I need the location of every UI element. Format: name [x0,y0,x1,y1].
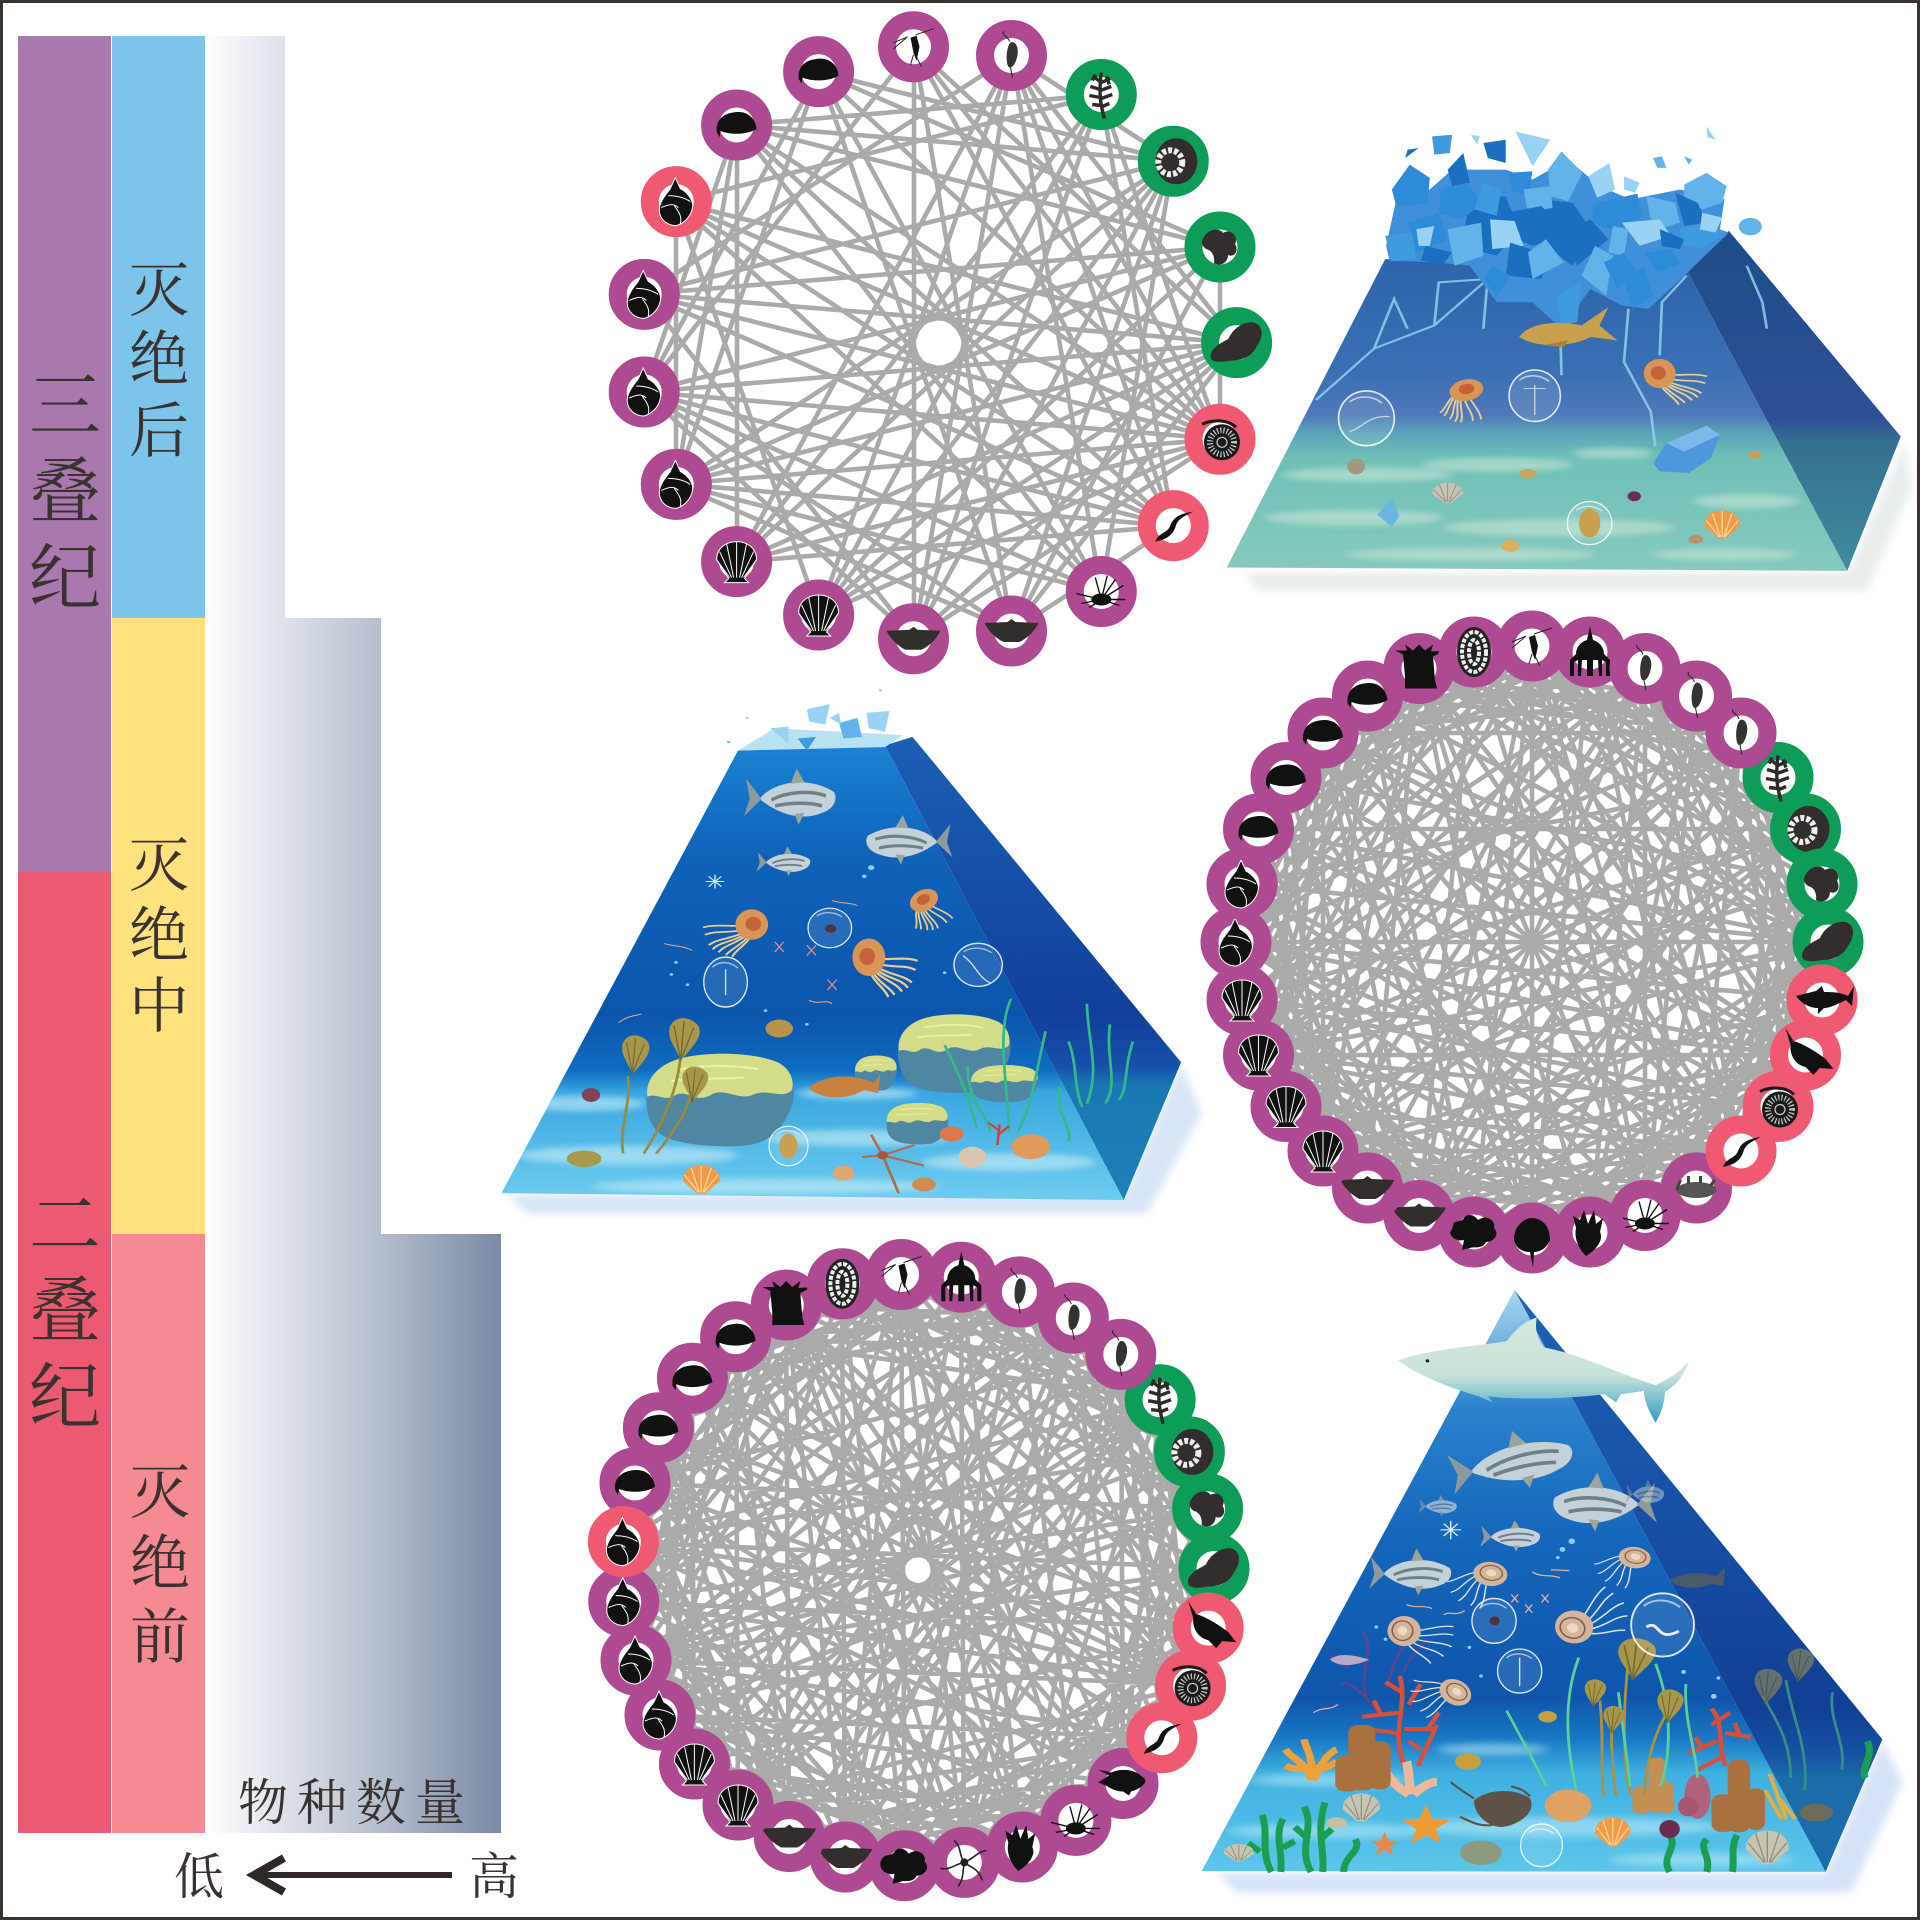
node: flagellate [993,1265,1046,1318]
node: scallop [668,1738,721,1790]
ice on summit [727,689,903,751]
network links [644,47,1237,639]
node: scallop [710,535,763,588]
node: snail, pink [650,175,703,228]
food web: during extinction [1210,620,1854,1268]
food web: pre-extinction [597,1248,1241,1892]
node: bony fish [1182,1601,1236,1655]
green seaweed [1248,1741,1869,1872]
period bar: Permian [18,872,111,1833]
food web: post-extinction [618,20,1263,665]
pyramid: pre-extinction ocean [1202,1290,1902,1892]
node: seaweed [1134,1373,1187,1426]
node: algae mat [1188,1542,1240,1595]
stage bar: post-extinction [112,36,205,618]
fishes [744,768,952,1097]
stage bar: during extinction: 绝 [129,903,189,969]
node: snail, pink [597,1515,650,1568]
node: ostracod [1232,802,1285,856]
node: algae mat [1802,916,1854,968]
node: ammonite [1194,413,1246,466]
red corals [1362,1676,1751,1770]
nodes [597,1248,1241,1892]
node: snail [1210,916,1262,968]
node: foraminifera [1147,135,1200,188]
arrow: high to low [254,1858,452,1892]
node: flagellate [985,29,1038,82]
period bar: Triassic: 三 [29,367,101,447]
node: ammonite [1164,1659,1217,1712]
node: copepod [875,1248,928,1301]
node: seaweed [1075,68,1128,121]
seabed streaks [518,1087,1096,1194]
node: brachiopod [818,1830,872,1884]
node: seaweed [1752,751,1804,804]
stage bar: pre-extinction: 绝 [130,1531,190,1597]
ice blocks [1385,126,1762,329]
node: scallop [792,588,845,642]
node: snail [618,366,671,418]
period bar: Triassic: 叠 [29,453,101,533]
node: sea urchin [1075,565,1128,618]
gold fish [1519,307,1617,347]
stage bar: during extinction [112,618,205,1234]
shells on seabed [1347,451,1761,552]
species count stepped gradient bars [205,36,501,1833]
ice cracks [1316,266,1767,446]
node: snail [650,458,703,511]
small bubbles [1374,1538,1720,1699]
plankton bubbles [704,908,1002,1166]
low label: 低 [174,1849,224,1905]
seabed streaks [1227,1744,1795,1866]
node: diatom [816,1257,869,1310]
node: brachiopod [1340,1162,1394,1214]
ammonites [1427,359,1707,430]
node: snail [597,1575,650,1628]
node: trilobite [1506,1212,1558,1268]
ammonites [703,885,964,997]
node: flagellate [1094,1328,1147,1381]
node: worm [1135,1711,1188,1764]
side face [1684,231,1901,571]
node: ostracod [792,45,845,98]
node: flagellate [1714,706,1768,760]
shark [1398,1318,1689,1423]
front face [1227,259,1847,571]
node: algae blob [1796,858,1848,910]
node: radiolarian [935,1251,988,1304]
stage bar: post-extinction: 后 [129,399,189,465]
node: coral [878,1839,931,1892]
node: foraminifera [1163,1425,1216,1478]
node: urchin [1049,1794,1102,1847]
node: flagellate [1047,1292,1100,1344]
pyramid: during extinction ocean [501,689,1202,1214]
node: diatom [1448,626,1500,678]
node: brachiopod [886,612,940,665]
node: scallop [712,1778,764,1832]
shadow [508,1064,1202,1214]
nodes [618,20,1263,665]
kelp fans [622,1018,708,1154]
period bar: Permian: 纪 [29,1358,101,1438]
node: anemone [760,1278,813,1332]
node: brachiopod [984,604,1038,658]
node: urchin [1618,1189,1672,1242]
node: shark [1796,974,1854,1026]
node: anemone [1392,642,1446,695]
stage bar: pre-extinction: 灭 [130,1460,190,1526]
node: snail [634,1688,686,1742]
stage bar: pre-extinction [112,1234,205,1833]
nautiloids [1385,1541,1653,1729]
front face [1202,1290,1826,1872]
stage bar: during extinction: 灭 [129,833,189,899]
seabed streaks [1265,448,1800,561]
node: ostracod [666,1352,719,1405]
node: snail [618,268,671,321]
shadow [1247,441,1912,591]
period bar: Triassic: 纪 [29,539,101,619]
node: radiolarian [1564,626,1616,678]
sea grass [945,999,1133,1141]
node: algae blob [1194,220,1246,274]
node: small fish [1096,1757,1150,1810]
node: scallop [1296,1124,1350,1178]
rocks with algae [646,1014,1038,1146]
node: ostracod [710,98,763,152]
node: brachiopod [1392,1189,1446,1242]
node: ostracod [1296,706,1350,760]
brown sponges [1335,1725,1765,1832]
shells and starfish [567,1020,1050,1194]
node: worm [1147,499,1200,552]
small bubbles [670,865,946,1026]
plankton bubbles [1472,1593,1694,1867]
node: worm [1714,1124,1768,1178]
node: ostracod [1260,751,1312,804]
blue ice rock [1377,426,1720,527]
node: flagellate [1618,642,1672,695]
node: flagellate [1670,670,1723,722]
fishes [1330,1421,1725,1665]
timeline columns [18,36,205,1833]
node: ostracod [608,1456,662,1510]
stage bar: during extinction: 中 [129,974,189,1040]
node: algae blob [1181,1482,1234,1535]
node: ammonite [1752,1080,1804,1133]
plankton bubbles [1339,370,1612,545]
nodes [1210,620,1854,1268]
side face [885,737,1181,1200]
stage bar: post-extinction: 绝 [129,327,189,393]
stage bar: pre-extinction: 前 [130,1605,190,1671]
node: copepod [887,20,940,73]
species count label: 物种数量 [238,1775,474,1831]
shadow [1218,1741,1902,1892]
pyramid: post-extinction ocean [1227,126,1912,591]
background red coral [1330,1631,1427,1709]
node: ostracod [709,1310,762,1363]
period bar: Permian: 叠 [29,1272,101,1352]
node: brachiopod [762,1810,816,1863]
node: coral [1448,1206,1500,1258]
node: bony fish [1779,1028,1834,1082]
sea life on floor [1224,1711,1833,1865]
drifting plankton [1313,1521,1569,1713]
node: crinoid [1564,1206,1616,1258]
node: scallop [1232,1028,1285,1082]
node: snail [610,1634,662,1686]
node: copepod [1506,620,1558,672]
pale corals [1545,1774,1711,1822]
period bar: Triassic [18,36,111,872]
side face [1515,1290,1882,1872]
node: snail [1216,858,1268,910]
node: brittle star [938,1836,991,1889]
node: sponge strip [1670,1162,1723,1214]
orange corals [1285,1739,1795,1819]
node: foraminifera [1779,802,1832,856]
high label: 高 [469,1849,519,1905]
node: ostracod [1341,670,1394,722]
node: algae mat [1210,316,1263,369]
period bar: Permian: 二 [29,1186,101,1266]
network links [623,1274,1214,1866]
front face [501,745,1124,1200]
network links [1236,646,1828,1238]
node: crinoid [996,1820,1049,1874]
drifting plankton [619,875,857,1023]
node: scallop [1260,1080,1312,1133]
node: ostracod [632,1401,685,1454]
stage bar: post-extinction: 灭 [129,258,189,324]
node: scallop [1216,974,1268,1026]
kelp fans and grass [1507,1638,1843,1796]
